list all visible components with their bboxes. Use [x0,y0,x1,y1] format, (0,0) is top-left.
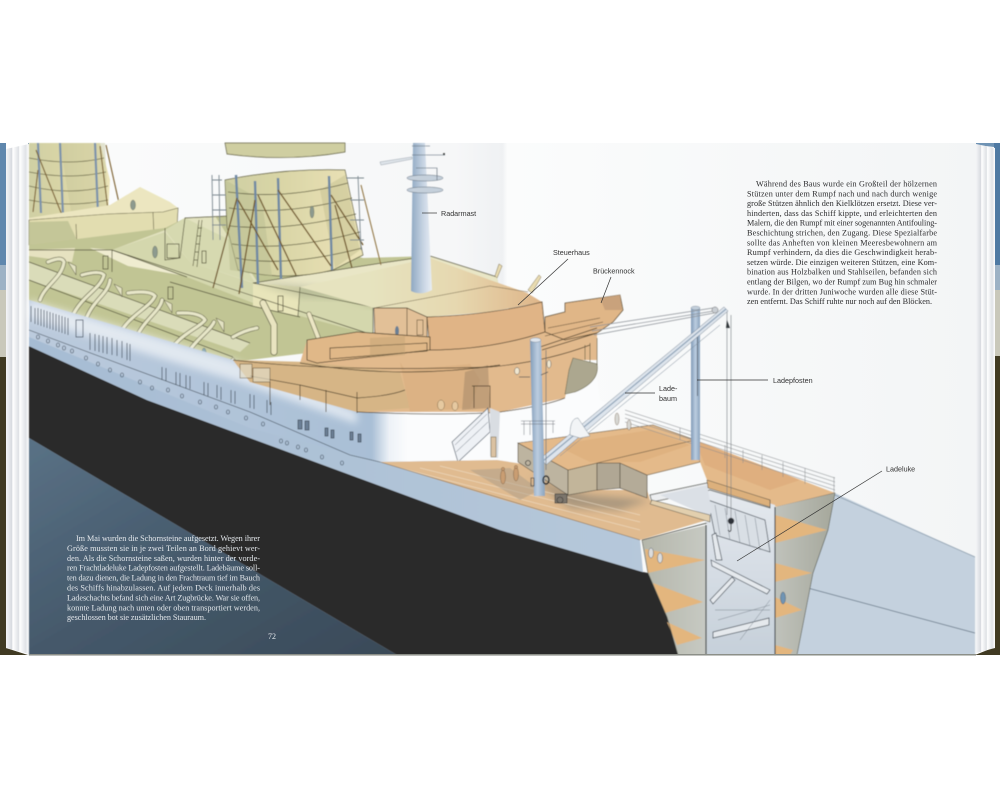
round bridge underside [565,338,597,394]
white hull [29,300,620,465]
cargo shaft [707,483,775,655]
funnel one base [29,187,178,247]
ventilator cowls [68,262,224,332]
bridge front [427,302,545,350]
funnel one with scaffold [29,143,119,220]
text block left page: ten dazu dienen, die Ladung in den Frachtraum tief im Bauch [67,574,260,583]
water and ground [29,438,397,655]
terraces [29,216,500,357]
cargo boom [541,307,728,465]
boat deck ventilators [40,259,318,383]
windows and portholes [31,306,361,442]
text block right page: entlang der Bilgen, wo der Rumpf zum Bug hin schmaler [747,278,937,286]
upper superstructure base [29,216,500,362]
text block left page: konnte Ladung nach unten oder oben transportiert werden, [67,603,260,612]
cargo decks [645,515,827,655]
text block left page: Ladeschachts befand sich eine Art Zugbrücke. War sie offen, [67,593,260,602]
funnel two scaffold [212,175,381,294]
page number: 72 [268,632,276,641]
ship illustration [29,143,975,655]
text block left page: ren Frachtladeluke Ladepfosten aufgestellt. Ladebäume soll- [67,564,260,573]
text block right page: zen entfernt. Das Schiff ruhte nur noch auf den Blöcken. [747,297,932,306]
text block right page [747,180,938,306]
text block right page: setzen würde. Die einzigen weiteren Stützen, eine Kom- [747,258,937,267]
ladder [193,220,202,267]
winch [555,494,567,503]
fore cargo post [691,306,700,460]
label Brückennock: Brückennock [593,266,635,276]
text block left page: des Schiffs hinabzulassen. Auf jedem Deck innerhalb des [67,584,260,592]
text block left page: Größe mussten sie in je zwei Teilen an Bord gehievt wer- [67,544,260,553]
text block right page: Stützen unter dem Rumpf nach und nach durch wenige [747,189,937,198]
small figures on superstructure [130,200,450,362]
bridge wing [545,295,623,340]
text block left page: Im Mai wurden die Schornsteine aufgesetzt. Wegen ihrer [76,534,260,543]
wheelhouse [374,308,427,338]
text block left page: geschlossen bot sie zusätzlichen Stauraum. [67,613,206,622]
text block right page: wurde. In der dritten Juniwoche wurden alle diese Stüt- [747,287,937,296]
figures on bridge deck [438,400,458,410]
rigging wires [540,308,714,470]
callout lines [422,213,882,561]
cargo cables and hook [726,310,734,532]
text block left page [67,534,260,622]
book bottom edge [29,654,976,656]
text block right page: hinderten, dass das Schiff kippte, und erleichterten den [747,209,937,218]
text block right page: Malern, die den Rumpf mit einer sogenannten Antifouling- [747,219,937,228]
text block right page: Während des Baus wurde ein Großteil der hölzernen [756,180,937,188]
hull highlight along top edge [29,300,357,424]
small deck railing near post [521,421,555,435]
aft promenade windows [240,364,270,382]
cross section of hull [642,483,835,655]
label Ladebaum [659,384,678,403]
funnel two [225,170,363,276]
label Ladebaum: Lade- [659,384,678,393]
text block right page: bination aus Holzbalken und Stahlseilen, befanden sich [747,268,937,277]
folding hatch doors [708,500,770,638]
orange bridge body [233,302,597,414]
hull band [29,300,643,572]
aft cargo post [514,338,551,496]
label Radarmast: Radarmast [441,209,476,218]
text block right page: Beschichtung strichen, den Zugang. Diese Spezialfarbe [747,228,937,238]
text block left page: den. Als die Schornsteine saßen, wurden hinter der vorde- [67,554,260,563]
radar mast [380,143,445,293]
small doorway at bridge [570,418,590,438]
page stack right [976,144,995,653]
funnel two base shadow [253,278,430,298]
lower deck forward of bridge [380,460,707,540]
bridge roof [300,258,542,317]
text block right page: große Stützen ähnlich den Kielklötzen ersetzt. Diese ver- [747,199,937,208]
hull stairs and door [452,408,500,462]
deck figures [500,413,631,484]
book pages [29,143,976,655]
raised block [307,332,430,363]
hatch coaming [650,480,770,522]
dark lower hull [29,346,678,655]
funnel two top section [225,143,345,158]
label Ladeluke: Ladeluke [886,464,915,474]
page stack left [6,144,29,654]
roof ventilators [495,264,541,293]
text block right page: Rumpf verhindern, da dies die Geschwindigkeit herab- [747,248,937,257]
label Ladepfosten: Ladepfosten [773,376,813,385]
pale forward hull [778,493,975,655]
raised hatch structure [518,425,700,498]
label Steuerhaus: Steuerhaus [553,248,590,257]
background behind open book [0,143,1000,655]
text block right page: sollte das Anheften von kleinen Meeresbewohnern am [747,238,938,247]
label Ladebaum: baum [659,394,677,403]
figures in section [648,548,786,604]
forward deck [695,440,835,507]
deck railing [625,410,835,493]
